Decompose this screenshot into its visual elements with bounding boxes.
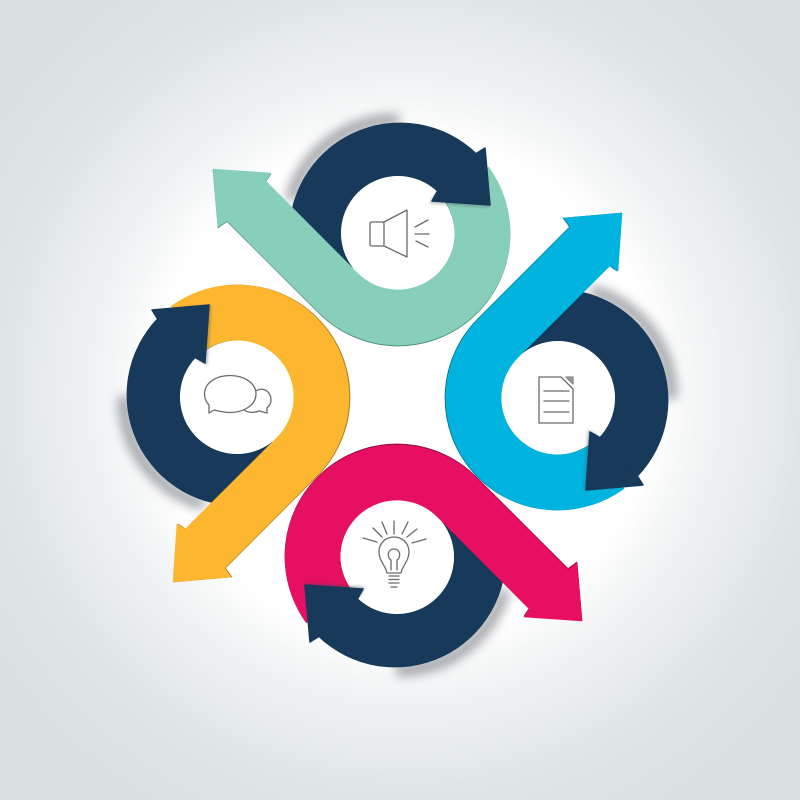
dark arrowhead (586, 432, 643, 490)
arrowhead shadow (307, 584, 363, 639)
arrow edge (172, 285, 350, 582)
arrowhead shadow (432, 151, 488, 206)
arrowhead shadow (585, 432, 640, 488)
ring shadow (124, 396, 204, 504)
blue arrow (446, 213, 624, 510)
icon: speaker (370, 210, 429, 257)
dark arrowhead (432, 148, 490, 205)
icon: document (539, 377, 573, 423)
icon: light bulb (363, 521, 426, 587)
dark arrowhead (152, 305, 209, 363)
pink arrow (285, 445, 582, 623)
ring shadow (291, 120, 399, 200)
icon: speech bubbles (204, 376, 271, 413)
arrow edge (445, 213, 623, 510)
mint arrow (213, 167, 510, 345)
dark ring (289, 123, 477, 268)
panel: bottom unit, pink arrow with light bulb (285, 444, 582, 670)
panel: right unit, blue arrow with document (445, 213, 671, 510)
arrow edge (285, 444, 582, 622)
panel: top unit, mint arrow with speaker (213, 120, 510, 346)
inner white disc (180, 340, 294, 454)
ring shadow (396, 590, 504, 670)
yellow arrow (171, 285, 349, 582)
panel: left unit, yellow arrow with chat bubbles (124, 285, 350, 582)
inner white disc (341, 176, 455, 290)
dark ring (523, 289, 668, 477)
dark ring (127, 318, 272, 506)
ring shadow (591, 291, 671, 399)
dark arrowhead (305, 585, 363, 642)
inner white disc (340, 500, 454, 614)
arrow edge (213, 168, 510, 346)
arrowhead shadow (155, 307, 210, 363)
inner white disc (501, 341, 615, 455)
dark ring (318, 522, 506, 667)
